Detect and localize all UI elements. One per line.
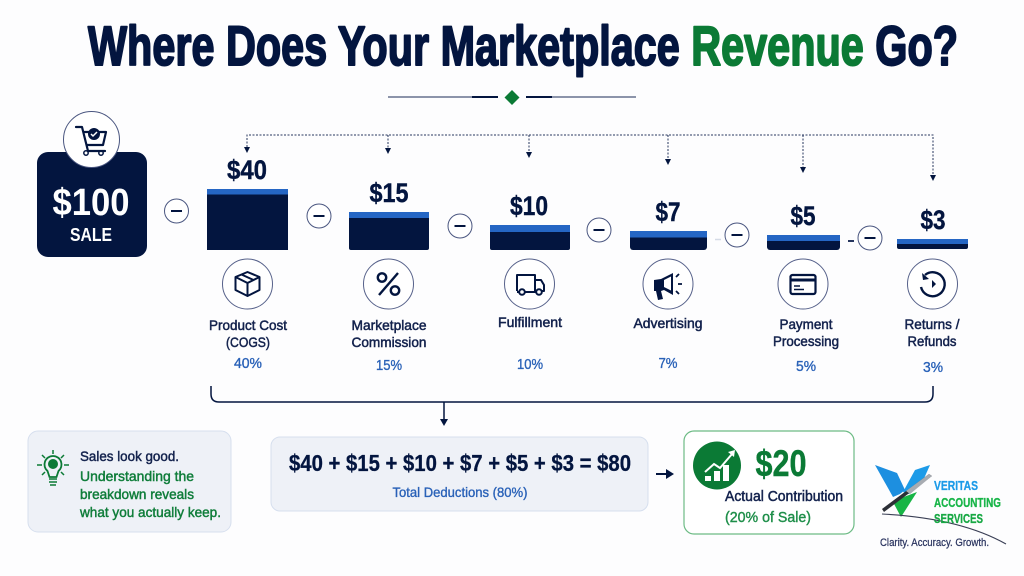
arrow to result: [656, 469, 674, 479]
column: product cost $40: (COGS): [226, 334, 270, 350]
logo: Veritas Accounting Services: VERITAS: [934, 478, 978, 493]
column: marketplace commission $15: $15: [370, 178, 408, 208]
column: marketplace commission $15: [349, 178, 429, 374]
column: fulfillment $10: 10%: [517, 357, 543, 373]
dashed distribution connector with arrows: [244, 135, 936, 181]
icon: green light bulb: [37, 450, 69, 485]
logo: Veritas Accounting Services: ACCOUNTING: [934, 495, 1001, 510]
logo: Veritas Accounting Services: [875, 465, 1006, 549]
callout: sales insight: [28, 431, 231, 532]
title: Where Does Your Marketplace Revenue Go?: [88, 14, 958, 77]
panel: total deductions: Total Deductions (80%): [392, 484, 528, 500]
column: advertising $7: $7: [656, 197, 680, 227]
panel: actual contribution result: [684, 431, 854, 534]
icon: box: [222, 259, 272, 309]
sale total card: [37, 112, 147, 257]
minus operators: [164, 199, 882, 250]
column: advertising $7: 7%: [658, 356, 678, 372]
column: marketplace commission $15: Marketplace: [352, 317, 427, 333]
column: returns and refunds $3: $3: [920, 205, 946, 235]
sale total card: SALE: [70, 225, 112, 245]
panel: actual contribution result: $20: [756, 443, 806, 484]
icon: megaphone: [643, 259, 693, 309]
column: marketplace commission $15: 15%: [376, 358, 402, 374]
column: marketplace commission $15: Commission: [352, 334, 426, 350]
callout: sales insight: breakdown reveals: [80, 486, 194, 502]
column: payment processing $5: [767, 201, 840, 375]
icon: shopping cart with check: [64, 112, 120, 168]
sale total card: $100: [52, 182, 130, 224]
column: product cost $40: 40%: [234, 356, 262, 372]
panel: actual contribution result: Actual Contribution: [725, 489, 843, 505]
column: product cost $40: Product Cost: [209, 317, 287, 333]
column: payment processing $5: Processing: [773, 333, 839, 349]
logo: Veritas Accounting Services: SERVICES: [934, 511, 983, 526]
icon: percent: [364, 259, 414, 309]
logo: Veritas Accounting Services: Clarity. Accuracy. Growth.: [880, 537, 989, 549]
callout: sales insight: Understanding the: [80, 468, 194, 484]
column: returns and refunds $3: Returns /: [904, 316, 960, 332]
column: product cost $40: [207, 155, 288, 372]
panel: total deductions: $40 + $15 + $10 + $7 + $5 + $3 = $80: [289, 450, 631, 476]
callout: sales insight: Sales look good.: [80, 448, 179, 464]
column: product cost $40: $40: [227, 155, 267, 185]
icon: V mark with pen: [875, 465, 1006, 544]
column: payment processing $5: 5%: [796, 359, 816, 375]
icon: payment card: [778, 259, 828, 309]
column: fulfillment $10: Fulfillment: [498, 314, 562, 330]
column: payment processing $5: $5: [790, 201, 816, 231]
column: advertising $7: Advertising: [634, 315, 702, 331]
column: fulfillment $10: [490, 191, 570, 373]
column: returns and refunds $3: 3%: [923, 360, 943, 376]
column: payment processing $5: Payment: [780, 316, 833, 332]
panel: total deductions: [271, 437, 648, 511]
column: advertising $7: [630, 197, 707, 372]
panel: actual contribution result: (20% of Sale): [725, 510, 811, 526]
column: returns and refunds $3: [897, 205, 968, 376]
icon: return clock: [908, 259, 958, 309]
summary bracket with down arrow: [211, 386, 933, 426]
column: fulfillment $10: $10: [510, 191, 548, 221]
icon: growth chart: [693, 442, 741, 490]
column: returns and refunds $3: Refunds: [908, 333, 956, 349]
icon: delivery truck: [504, 259, 554, 309]
title divider with diamond: [388, 90, 636, 105]
callout: sales insight: what you actually keep.: [79, 504, 221, 520]
